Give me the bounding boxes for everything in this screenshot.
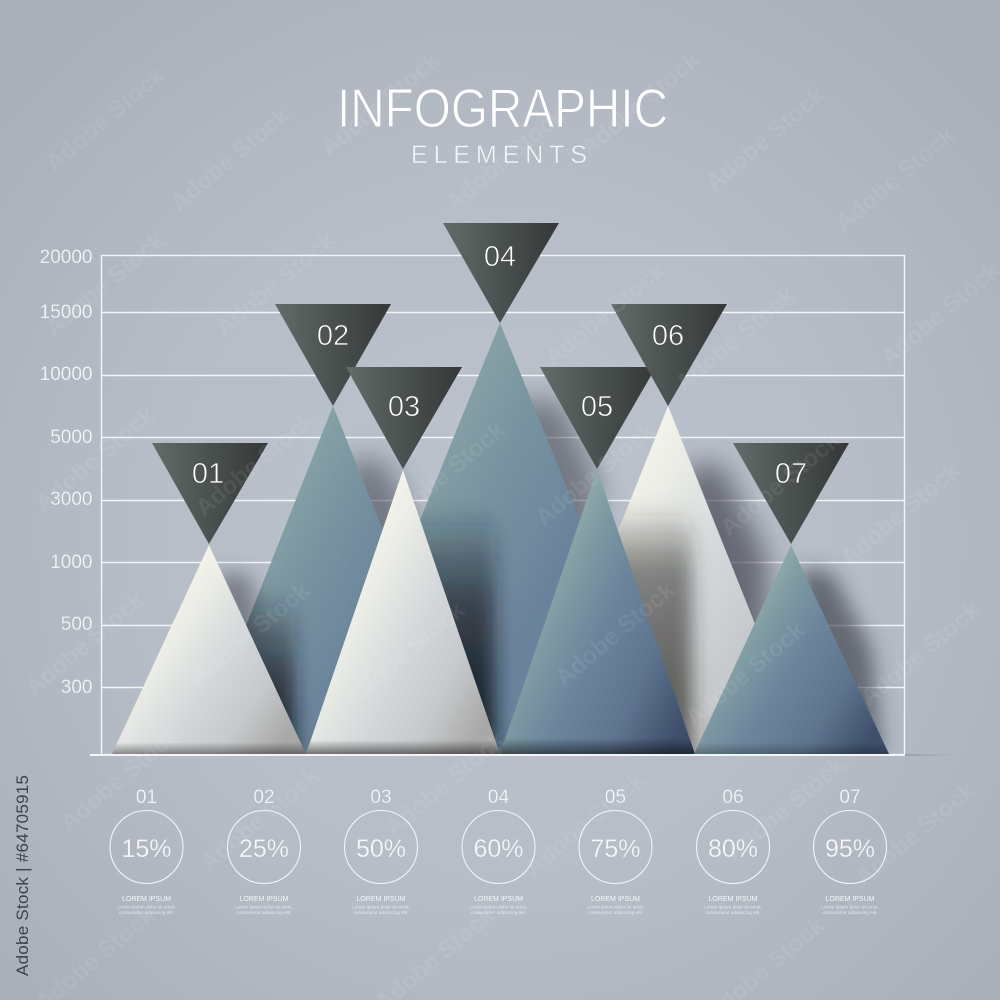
stat 01 [110, 787, 183, 915]
stat 04: LOREM IPSUM [474, 896, 523, 903]
watermark: Adobe Stock [575, 46, 706, 162]
stat 07: 95% [825, 835, 875, 863]
watermark: Adobe Stock [720, 751, 851, 867]
cone 02 [246, 406, 382, 754]
y axis labels: 300 [61, 677, 92, 698]
stat 05 [579, 787, 652, 915]
stat 03: consectetur adipiscing elit. [354, 910, 408, 915]
marker 05 [540, 367, 656, 469]
watermark: Adobe Stock [520, 766, 651, 882]
shadow of cone 07 [800, 568, 882, 754]
stat 03: 50% [356, 835, 406, 863]
marker 02 [275, 304, 391, 406]
watermark: Adobe Stock [855, 596, 986, 712]
shading from cone 01 [246, 595, 308, 754]
stat 07: 07 [839, 787, 861, 808]
stat 04: 60% [473, 835, 524, 863]
watermark: Adobe Stock [40, 61, 171, 177]
cone 01 [112, 545, 306, 754]
marker 03 [346, 367, 462, 469]
title: ELEMENTS [411, 141, 587, 169]
stat 02: Lorem ipsum dolor sit amet, [235, 904, 293, 910]
stat 02: 25% [239, 835, 289, 863]
cone 05 [500, 470, 695, 754]
marker 03: 03 [388, 391, 420, 423]
shadow of cone 01 [218, 562, 268, 656]
stat 03: Lorem ipsum dolor sit amet, [352, 904, 410, 910]
title [337, 77, 668, 169]
stat 05: 75% [590, 835, 641, 863]
watermark: Adobe Stock [700, 81, 831, 197]
stat 06: 80% [708, 835, 758, 863]
stat 03: LOREM IPSUM [356, 896, 406, 903]
stat 01: LOREM IPSUM [122, 896, 171, 903]
watermark: Adobe Stock [20, 586, 151, 702]
watermark: Adobe Stock [185, 576, 316, 692]
watermark: Adobe Stock [315, 46, 446, 162]
cone 03 [306, 470, 500, 754]
watermark: Adobe Stock [195, 761, 326, 877]
shading from cone 05 [618, 507, 706, 752]
watermark: Adobe Stock [190, 406, 321, 522]
stock id text: Adobe Stock | #64705915 [13, 775, 32, 976]
stat 06: 06 [722, 787, 744, 808]
watermark: Adobe Stock [540, 256, 671, 372]
stat 04: consectetur adipiscing elit. [471, 910, 526, 915]
stat 01: 15% [121, 835, 172, 863]
watermark: Adobe Stock [680, 616, 811, 732]
cone 06 [618, 406, 755, 752]
marker 07: 07 [775, 458, 807, 490]
watermark: Adobe Stock [850, 776, 981, 892]
stat 03: 03 [370, 787, 392, 808]
y axis labels: 5000 [50, 427, 92, 448]
stat 05: 05 [605, 787, 626, 808]
cone 07 [694, 545, 889, 754]
marker 01 [152, 443, 268, 544]
marker 07 [733, 443, 849, 544]
stat 05: consectetur adipiscing elit. [588, 910, 643, 915]
marker 06 [611, 304, 727, 406]
watermark: Adobe Stock [715, 426, 846, 542]
watermark: Adobe Stock [670, 281, 801, 397]
stat 06: Lorem ipsum dolor sit amet, [704, 904, 762, 910]
watermark: Adobe Stock [380, 726, 511, 842]
stat 06: LOREM IPSUM [708, 896, 758, 903]
stat 07: Lorem ipsum dolor sit amet, [821, 904, 879, 910]
marker 06: 06 [652, 320, 684, 352]
y axis labels [40, 247, 92, 698]
watermark: Adobe Stock [530, 416, 661, 532]
chart grid [90, 256, 905, 755]
y axis labels: 15000 [40, 302, 92, 323]
watermark: Adobe Stock [835, 456, 966, 572]
watermark: Adobe Stock [340, 596, 471, 712]
stat 06 [696, 787, 770, 915]
y axis labels: 10000 [40, 364, 92, 385]
stat 07: LOREM IPSUM [825, 896, 875, 903]
stat 03 [344, 787, 418, 915]
stat 01: Lorem ipsum dolor sit amet, [118, 904, 175, 910]
watermark: Adobe Stock [550, 576, 681, 692]
stat 01: consectetur adipiscing elit. [119, 910, 174, 915]
stat 06: consectetur adipiscing elit. [706, 910, 760, 915]
stat 07: consectetur adipiscing elit. [823, 910, 877, 915]
stat 07 [814, 787, 886, 915]
watermark: Adobe Stock [440, 101, 571, 217]
watermark: Adobe Stock [40, 226, 171, 342]
marker 02: 02 [317, 320, 349, 352]
shading from cone 03 [420, 512, 508, 754]
cone 04 [420, 323, 580, 754]
marker 01: 01 [192, 458, 224, 490]
y axis labels: 500 [61, 614, 92, 635]
watermark: Adobe Stock [830, 121, 961, 237]
watermark: Adobe Stock [380, 416, 511, 532]
watermark: Adobe Stock [210, 226, 341, 342]
stat 02 [228, 787, 300, 915]
watermark: Adobe Stock [165, 101, 296, 217]
y axis labels: 3000 [50, 489, 92, 510]
marker 05: 05 [581, 391, 613, 423]
shadows behind rear cones [350, 384, 784, 624]
watermark: Adobe Stock [30, 401, 161, 517]
stat 04 [462, 787, 535, 915]
stat 02: 02 [253, 787, 275, 808]
stat 05: Lorem ipsum dolor sit amet, [587, 904, 644, 910]
y axis labels: 1000 [50, 552, 92, 573]
watermark: Adobe Stock [55, 721, 186, 837]
stat 02: consectetur adipiscing elit. [237, 910, 291, 915]
title: INFOGRAPHIC [337, 77, 668, 139]
stat 05: LOREM IPSUM [591, 896, 640, 903]
stat 01: 01 [136, 787, 157, 808]
stat 04: 04 [488, 787, 509, 808]
marker 04 [443, 223, 559, 323]
marker 04: 04 [484, 241, 516, 273]
stat 02: LOREM IPSUM [239, 896, 289, 903]
stat 04: Lorem ipsum dolor sit amet, [470, 904, 527, 910]
y axis labels: 20000 [40, 247, 92, 268]
